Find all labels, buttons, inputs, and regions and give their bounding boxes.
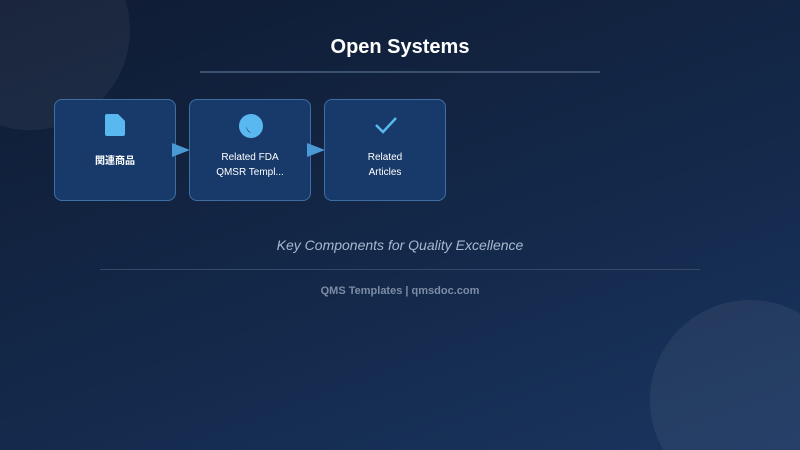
icon: check bbox=[375, 117, 397, 134]
panel: Related FDA: QMSR Templ... bbox=[216, 167, 284, 178]
panel: 関連商品: 関連商品 bbox=[95, 156, 135, 167]
subtitle: Key Components for Quality Excellence bbox=[277, 237, 523, 253]
footer: QMS Templates | qmsdoc.com bbox=[321, 285, 479, 297]
icon: globe bbox=[239, 114, 263, 138]
arrow 1 bbox=[172, 143, 189, 157]
arrow 2 bbox=[307, 143, 324, 157]
panel: Related FDA: Related FDA bbox=[221, 152, 279, 163]
title: Open Systems bbox=[331, 36, 469, 58]
panel: Related FDA bbox=[189, 99, 311, 201]
panel: 関連商品 bbox=[54, 99, 176, 201]
icon: document bbox=[105, 114, 125, 136]
panel: Related Articles: Related bbox=[368, 152, 402, 163]
panel: Related Articles: Articles bbox=[369, 167, 401, 178]
panel: Related Articles bbox=[324, 99, 446, 201]
